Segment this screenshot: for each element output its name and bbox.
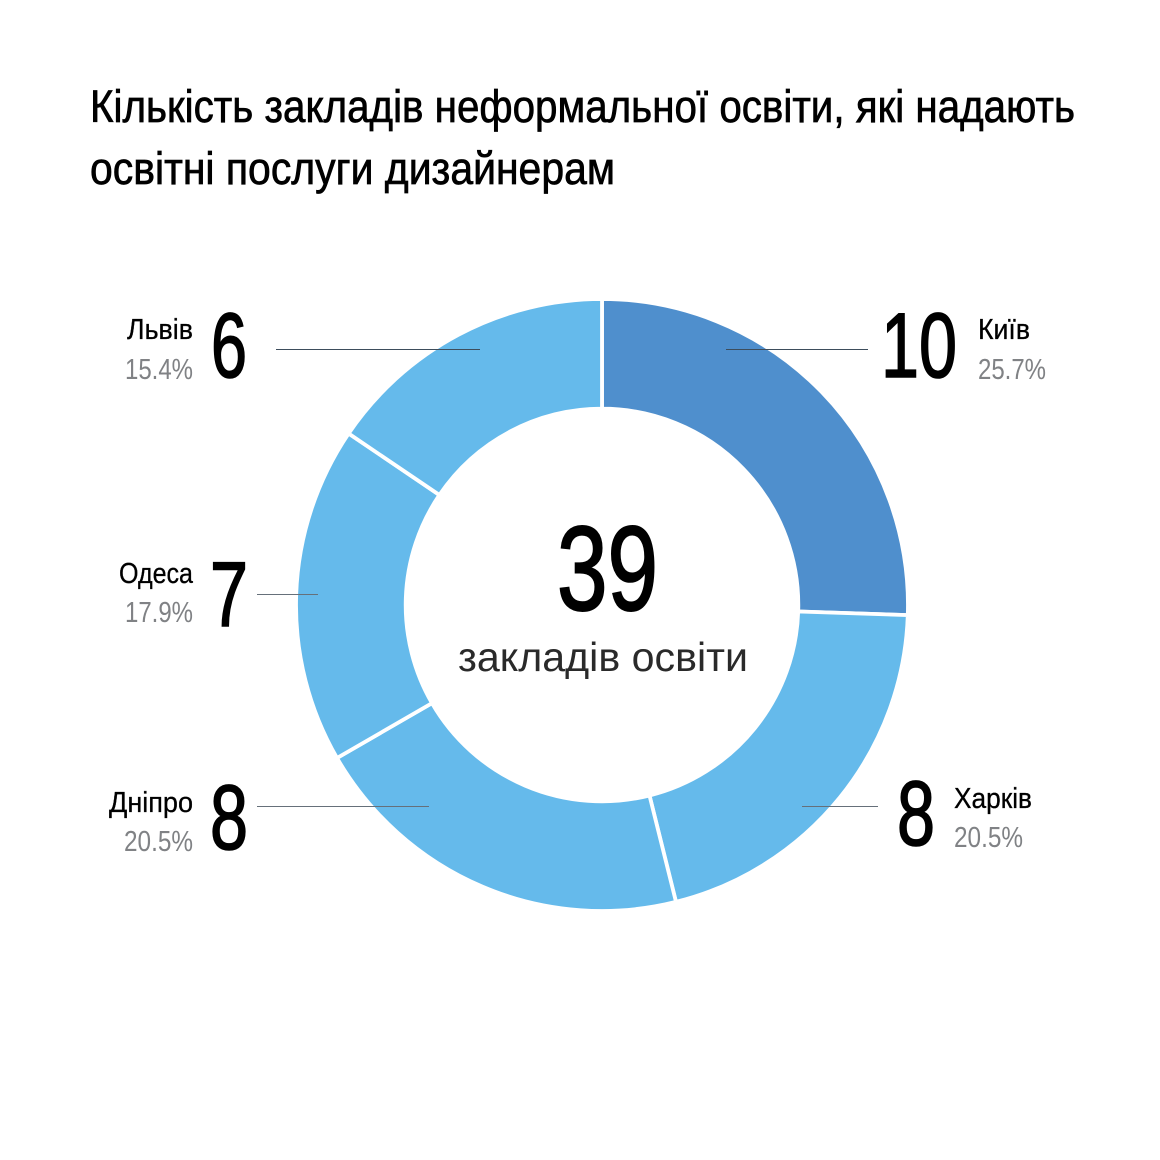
segment: Харків	[650, 612, 908, 902]
city: Дніпро	[109, 787, 193, 819]
total number: 39	[557, 502, 658, 636]
city: Одеса	[119, 558, 194, 590]
leader line	[257, 806, 429, 808]
leader line	[802, 806, 878, 808]
title: Кількість закладів неформальної освіти, які надають	[90, 81, 1075, 132]
title	[90, 81, 1075, 194]
callout: Львів	[125, 295, 480, 397]
percent: 17.9%	[125, 597, 193, 629]
segment: Дніпро	[337, 703, 676, 911]
city: Львів	[127, 314, 193, 346]
leader line	[726, 348, 868, 350]
callout: Одеса	[119, 544, 318, 646]
segment: Одеса	[296, 434, 439, 758]
city: Київ	[978, 314, 1030, 346]
callout: Дніпро	[109, 767, 429, 869]
donut chart	[296, 299, 908, 911]
leader line	[276, 348, 480, 350]
segment: Київ	[602, 299, 908, 615]
title: освітні послуги дизайнерам	[90, 143, 615, 194]
value: 7	[210, 544, 248, 646]
percent: 20.5%	[954, 822, 1023, 854]
value: 8	[210, 767, 248, 869]
value: 6	[211, 295, 247, 397]
callout: Київ	[726, 295, 1046, 397]
center total	[458, 502, 748, 680]
leader line	[257, 594, 318, 596]
percent: 25.7%	[978, 354, 1046, 386]
percent: 15.4%	[125, 354, 193, 386]
city: Харків	[954, 783, 1032, 815]
percent: 20.5%	[124, 826, 193, 858]
value: 8	[897, 763, 935, 865]
callout: Харків	[802, 763, 1032, 865]
value: 10	[881, 295, 957, 397]
segment: Львів	[349, 299, 602, 495]
total caption: закладів освіти	[458, 634, 748, 680]
